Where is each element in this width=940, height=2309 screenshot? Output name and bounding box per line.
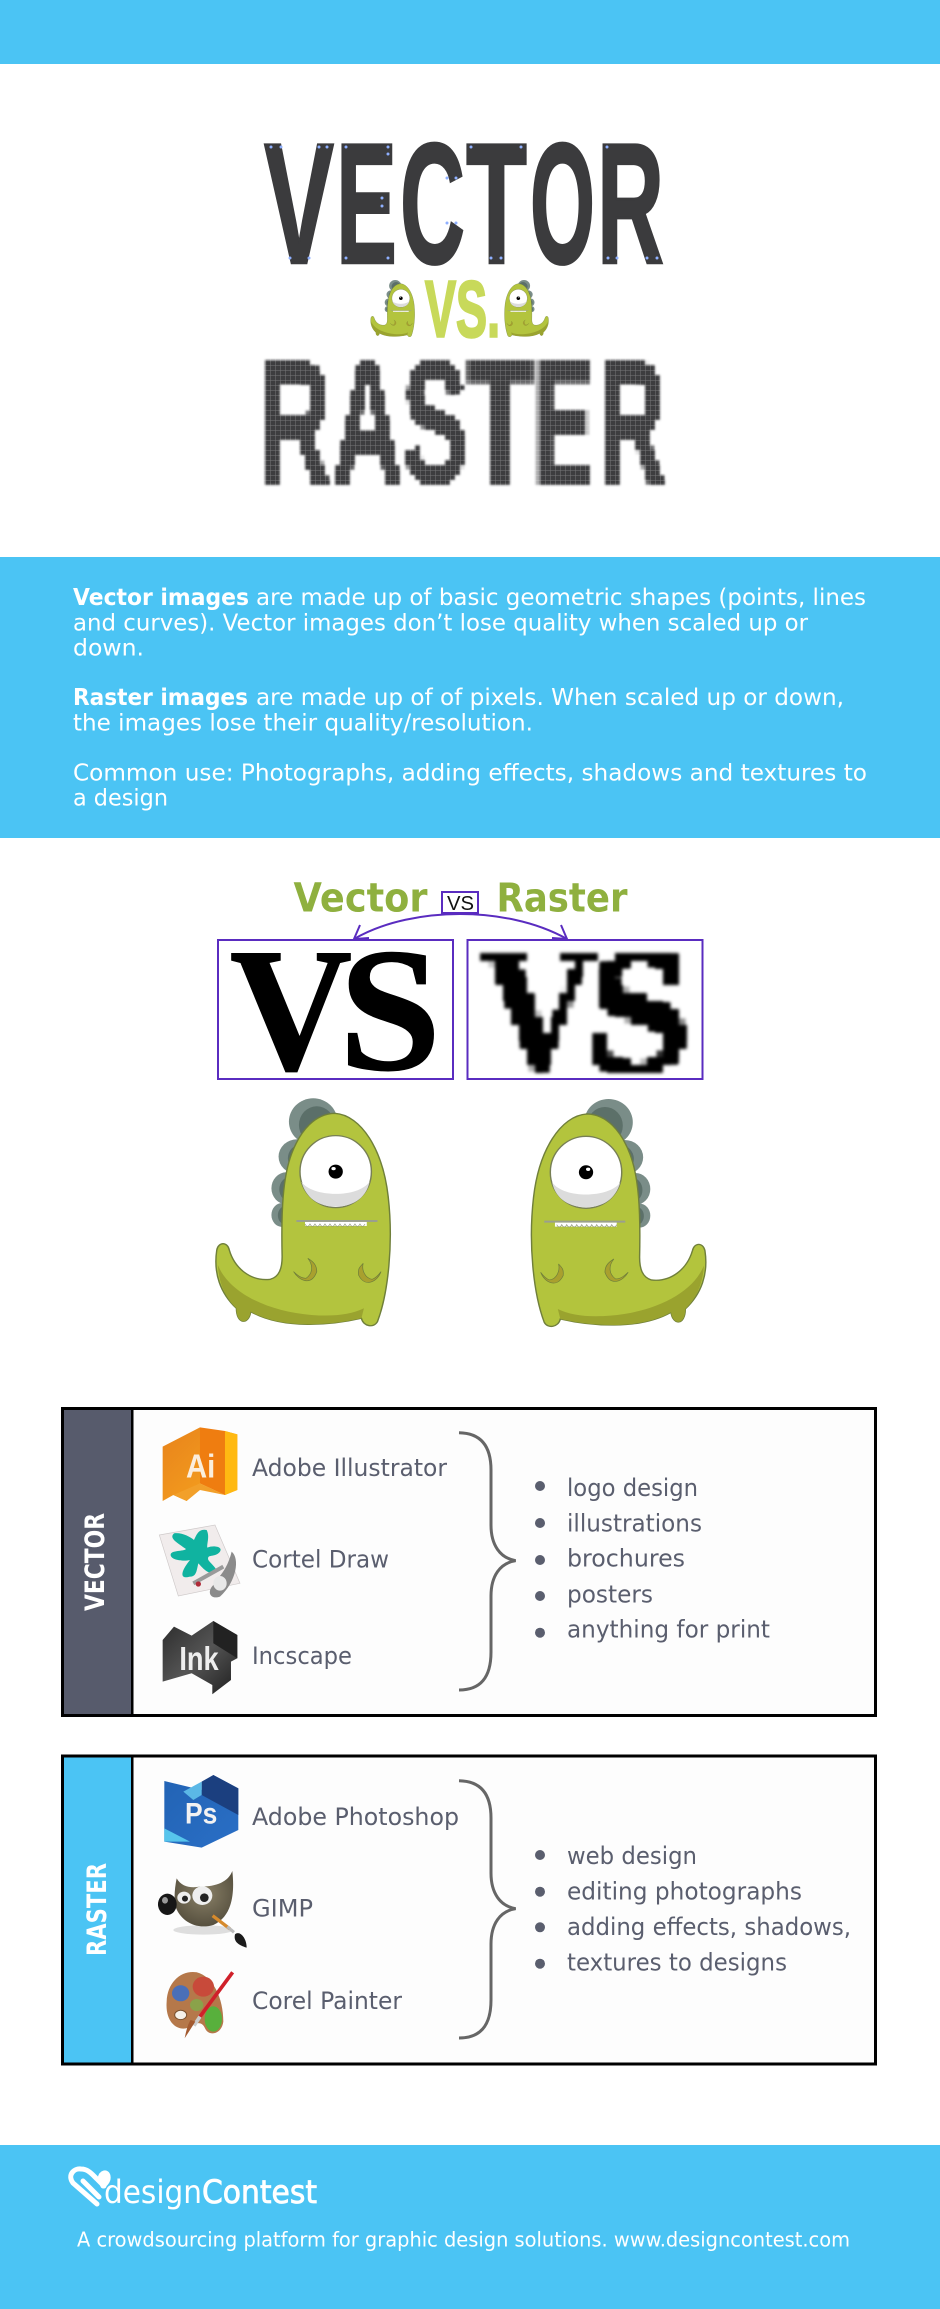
box: raster VS <box>468 914 702 1109</box>
icon: adobe photoshop <box>164 1775 238 1848</box>
box: vector VS: S <box>339 913 441 1108</box>
label: Cortel Draw: Cortel Draw <box>252 1546 389 1574</box>
heading: VECTOR: V <box>264 108 334 300</box>
footer <box>0 2145 940 2309</box>
heading: VECTOR: O <box>530 108 595 300</box>
list: vector uses: anything for print <box>567 1616 770 1644</box>
box: vector VS <box>218 913 453 1108</box>
list: vector uses <box>535 1474 770 1644</box>
heading: RASTER: E <box>532 323 595 522</box>
small vs box: VS <box>447 893 474 915</box>
box: raster VS: V <box>482 914 596 1109</box>
text: vector images definition: and curves). Vector images don’t lose quality when scaled up or <box>73 611 809 637</box>
mascot: vector <box>216 1098 390 1326</box>
label: Adobe Photoshop: Adobe Photoshop <box>252 1803 459 1831</box>
heading: VECTOR: C <box>400 108 465 300</box>
list: raster uses: textures to designs <box>567 1949 787 1977</box>
label: Incscape: Incscape <box>252 1642 352 1670</box>
list: vector uses: illustrations <box>567 1510 702 1538</box>
heading: RASTER <box>255 323 675 522</box>
label: Corel Painter: Corel Painter <box>252 1987 402 2015</box>
top banner <box>0 0 940 64</box>
mini mascot left <box>371 280 415 337</box>
sidebar: vector: VECTOR <box>80 1513 111 1611</box>
heading: VECTOR: T <box>466 108 527 300</box>
icon: corel painter <box>167 1972 233 2038</box>
text: VS.: VS. <box>425 264 500 354</box>
sidebar: vector <box>64 1408 134 1716</box>
text: raster images definition: the images lose their quality/resolution. <box>73 711 533 737</box>
text: raster images definition: Raster images <box>73 685 248 711</box>
heading: VECTOR <box>264 108 664 300</box>
list: raster uses: adding effects, shadows, <box>567 1913 851 1941</box>
heading: Raster: Raster <box>496 876 628 922</box>
heading: Vector: Vector <box>294 876 428 922</box>
logo: designContest: design <box>104 2173 202 2211</box>
text: vector images definition: down. <box>73 636 144 662</box>
panel: definitions <box>0 557 940 838</box>
title: Vector vs. Raster <box>255 108 675 522</box>
icon: corel draw <box>159 1525 240 1597</box>
box: raster VS: S <box>586 914 692 1109</box>
heading: RASTER: T <box>467 323 533 522</box>
box: vector VS: V <box>230 913 352 1108</box>
icon: gimp <box>158 1871 247 1948</box>
text: raster images definition: are made up of of pixels. When scaled up or down, <box>256 685 844 711</box>
list: vector uses: posters <box>567 1581 653 1609</box>
bracket <box>459 1781 516 2038</box>
icon: adobe illustrator: Ai <box>186 1448 215 1485</box>
text: common use: Common use: Photographs, adding effects, shadows and textures to <box>73 761 867 787</box>
panel: vector tools <box>62 1408 876 1716</box>
heading: RASTER: R <box>598 323 666 522</box>
icon: inkscape: Ink <box>179 1641 219 1678</box>
heading: RASTER: A <box>332 323 403 522</box>
text: vector images definition: Vector images <box>73 585 249 611</box>
mini mascot right <box>505 280 548 337</box>
sidebar: raster <box>64 1756 134 2065</box>
heading: RASTER: R <box>261 323 331 522</box>
text: raster images definition <box>73 685 844 737</box>
text: vector images definition: are made up of basic geometric shapes (points, lines <box>256 585 866 611</box>
label: GIMP: GIMP <box>252 1895 313 1923</box>
list: vector uses: brochures <box>567 1545 685 1573</box>
heading: RASTER: S <box>402 323 468 522</box>
list: raster uses: editing photographs <box>567 1877 802 1905</box>
icon: inkscape <box>163 1621 237 1694</box>
comparison: vector vs raster <box>216 876 706 1326</box>
mascot: raster <box>531 1099 706 1326</box>
text: vector images definition <box>73 585 866 662</box>
sidebar: raster: RASTER <box>82 1863 113 1956</box>
icon: adobe photoshop: Ps <box>185 1798 217 1831</box>
bracket <box>459 1433 516 1690</box>
list: vector uses: logo design <box>567 1474 698 1502</box>
logo: designContest <box>71 2169 317 2211</box>
arrows: curved double arrow <box>354 914 567 939</box>
panel: raster tools <box>62 1756 876 2065</box>
heading: VECTOR: R <box>597 108 664 300</box>
heading: VECTOR: E <box>336 108 397 300</box>
text: common use: a design <box>73 786 168 812</box>
icon: adobe illustrator <box>163 1427 237 1501</box>
list: raster uses: web design <box>567 1842 697 1870</box>
text: common use <box>73 761 867 812</box>
list: raster uses <box>535 1842 851 1977</box>
logo: designContest: Contest <box>202 2173 317 2211</box>
label: Adobe Illustrator: Adobe Illustrator <box>252 1454 447 1482</box>
tagline: A crowdsourcing platform for graphic design solutions. www.designcontest.com <box>77 2228 850 2252</box>
